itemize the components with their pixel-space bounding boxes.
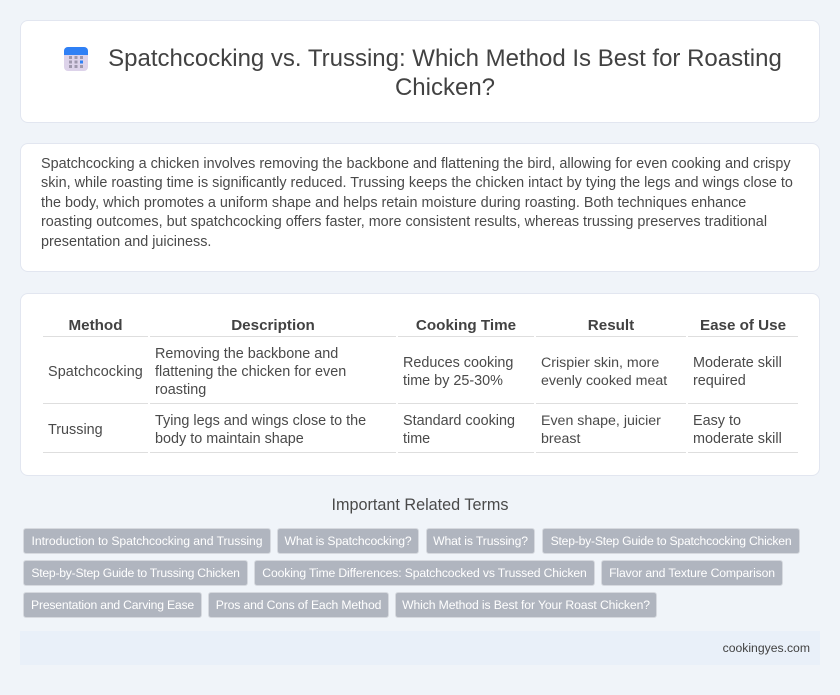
row: spatchcocking: time by 25-30%: [403, 373, 503, 389]
related terms tags: Which Method is Best for Your Roast Chicken?: [402, 598, 650, 612]
icon: calendar: [64, 47, 88, 71]
row: trussing: Trussing: [48, 422, 103, 438]
row: spatchcocking: flattening the chicken for even: [155, 364, 346, 380]
table header: Method: [68, 317, 122, 334]
related terms tags: Cooking Time Differences: Spatchcocked vs Trussed Chicken: [262, 566, 587, 580]
text block: introduction: Spatchcocking a chicken involves removing the backbone and flattening the bird, allowing for even cooking and crispy: [41, 156, 791, 172]
footer bar: [20, 631, 820, 665]
panel: introduction: [20, 143, 820, 272]
row: trussing: Even shape, juicier: [541, 413, 661, 429]
related terms tags: Step-by-Step Guide to Trussing Chicken: [31, 566, 240, 580]
table header: Cooking Time: [416, 317, 516, 334]
text block: introduction: presentation and juiciness.: [41, 234, 211, 250]
row: trussing: Standard cooking: [403, 413, 515, 429]
panel: comparison table: [20, 293, 820, 476]
table header: [68, 317, 786, 334]
footer source text: cookingyes.com: [723, 641, 810, 655]
text block: introduction: roasting outcomes, but spatchcocking offers faster, more consistent results, whereas trussing preserves traditional: [41, 214, 767, 230]
related terms tags: What is Spatchcocking?: [284, 534, 411, 548]
table header: Description: [231, 317, 315, 334]
related terms tags: Presentation and Carving Ease: [31, 598, 194, 612]
text block: introduction: skin, while roasting time is significantly reduced. Trussing keeps the chicken intact by tying the legs and wings close to: [41, 175, 793, 191]
row: trussing: body to maintain shape: [155, 431, 304, 447]
related terms tags: Introduction to Spatchcocking and Trussing: [32, 534, 262, 548]
title: Spatchcocking vs. Trussing: Which Method Is Best for Roasting Chicken?: [108, 45, 782, 101]
row: trussing: breast: [541, 431, 580, 447]
related terms tags: Pros and Cons of Each Method: [216, 598, 381, 612]
panel: title header: [20, 20, 820, 123]
table header: Ease of Use: [700, 317, 786, 334]
row: trussing: Tying legs and wings close to the: [155, 413, 366, 429]
row: spatchcocking: Crispier skin, more: [541, 355, 659, 371]
row: spatchcocking: Removing the backbone and: [155, 346, 338, 362]
row: trussing: moderate skill: [693, 431, 782, 447]
row: spatchcocking: Spatchcocking: [48, 364, 143, 380]
related terms tags: [23, 528, 800, 618]
related terms tags: What is Trussing?: [433, 534, 528, 548]
row: trussing: [48, 413, 782, 447]
row: spatchcocking: required: [693, 373, 746, 389]
row: spatchcocking: Moderate skill: [693, 355, 782, 371]
related terms tags: Flavor and Texture Comparison: [609, 566, 775, 580]
row: spatchcocking: roasting: [155, 382, 206, 398]
heading: important related terms: Important Related Terms: [332, 496, 508, 514]
row: trussing: Easy to: [693, 413, 741, 429]
text block: introduction: [41, 156, 793, 250]
row: spatchcocking: [48, 346, 782, 398]
row: spatchcocking: Reduces cooking: [403, 355, 513, 371]
row: spatchcocking: evenly cooked meat: [541, 373, 667, 389]
row: trussing: time: [403, 431, 430, 447]
related terms tags: Step-by-Step Guide to Spatchcocking Chicken: [551, 534, 791, 548]
table header: Result: [588, 317, 634, 334]
text block: introduction: the body, which promotes a uniform shape and helps retain moisture during roasting. Both techniques enhance: [41, 194, 746, 210]
